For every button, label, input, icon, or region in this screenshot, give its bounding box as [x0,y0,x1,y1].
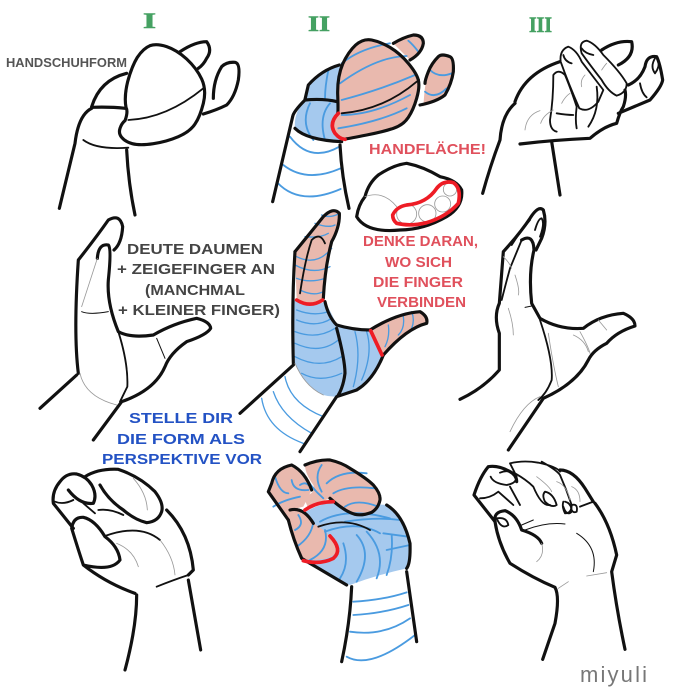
label: remember where fingers connect: DENKE DARAN, [363,233,478,250]
hand: column III bottom, finished fist [474,461,625,659]
label: remember where fingers connect: VERBINDEN [377,294,466,311]
label: imagine the form as perspective: DIE FORM ALS [117,431,245,448]
label: imagine the form as perspective: STELLE DIR [129,410,233,427]
instruction text: thumb and index finger: + ZEIGEFINGER AN [117,261,275,278]
label: remember where fingers connect: DIE FINGER [373,274,463,291]
hand: column II top, colored mitten [273,35,462,231]
label: Handfläche: HANDFLÄCHE! [369,141,486,158]
hand: column III top, finished drawing [483,41,663,195]
instruction text: thumb and index finger [117,241,280,319]
label: imagine the form as perspective [102,410,262,468]
column numeral I: I [143,8,156,33]
label: Handschuhform: HANDSCHUHFORM [6,55,127,70]
label: imagine the form as perspective: PERSPEKTIVE VOR [102,451,262,468]
instruction text: thumb and index finger: DEUTE DAUMEN [127,241,263,258]
label: remember where fingers connect [363,233,478,311]
instruction text: thumb and index finger: + KLEINER FINGER) [118,302,280,319]
column numeral III: III [529,12,552,37]
hand: column I top, mitten shape [59,42,239,215]
hand: column II middle, colored side view [240,211,427,452]
instruction text: thumb and index finger: (MANCHMAL [145,282,245,299]
hand: column II bottom, colored fist [268,460,417,662]
column numeral II: II [308,11,330,36]
artist signature: miyuli [580,662,647,687]
hand: column III middle, finished side view [460,209,635,450]
label: remember where fingers connect: WO SICH [385,254,452,271]
hand: column I bottom, mitten from below [53,469,201,670]
hand: column I middle, side view [40,218,211,440]
palm diagram inset [357,163,462,231]
